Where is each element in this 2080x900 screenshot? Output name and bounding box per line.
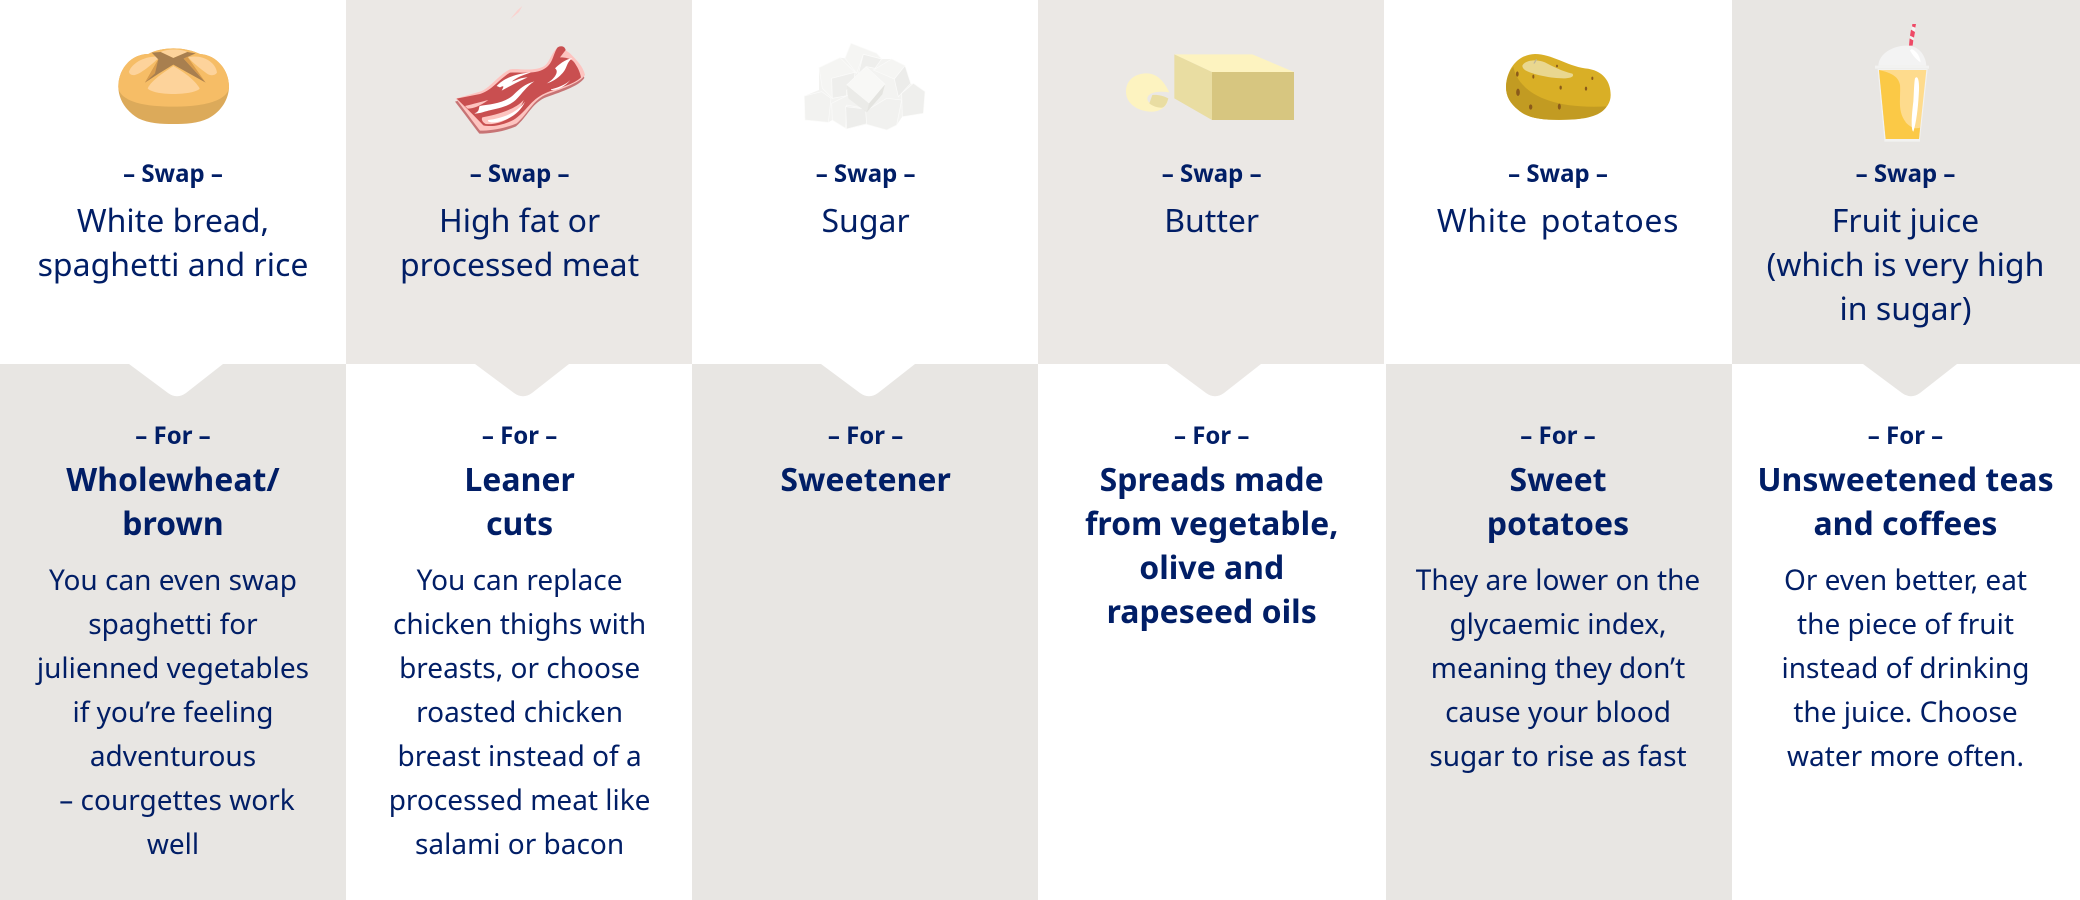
swap item: White potatoes	[1437, 199, 1679, 242]
replacement: olive and	[1139, 546, 1284, 588]
replacement	[1085, 458, 1338, 632]
replacement: Sweet	[1509, 458, 1607, 500]
detail: They are lower on the	[1416, 561, 1700, 599]
replacement: cuts	[486, 502, 553, 544]
detail: meaning they don’t	[1431, 649, 1685, 687]
replacement: rapeseed oils	[1107, 590, 1317, 632]
detail: roasted chicken	[416, 693, 623, 731]
for label: – For –	[1174, 419, 1249, 452]
detail: adventurous	[90, 737, 256, 775]
column 1: bread	[35, 157, 309, 863]
swap item: spaghetti and rice	[38, 243, 308, 286]
swap item: Fruit juice	[1832, 199, 1979, 242]
detail: You can even swap	[49, 561, 297, 599]
replacement: Leaner	[464, 458, 575, 500]
replacement	[1757, 458, 2054, 544]
detail: chicken thighs with	[393, 605, 646, 643]
swap label: – Swap –	[1856, 157, 1955, 190]
replacement: Unsweetened teas	[1757, 458, 2054, 500]
detail	[1416, 561, 1700, 775]
detail: – courgettes work	[59, 781, 295, 819]
detail: the juice. Choose	[1793, 693, 2018, 731]
swap item: White bread,	[77, 199, 269, 242]
swap label: – Swap –	[123, 157, 223, 190]
replacement	[464, 458, 575, 544]
swap label: – Swap –	[470, 157, 569, 190]
swap item: (which is very high	[1767, 243, 2044, 286]
detail: glycaemic index,	[1449, 605, 1667, 643]
detail: well	[147, 825, 199, 863]
replacement	[66, 458, 280, 544]
detail: instead of drinking	[1782, 649, 2029, 687]
detail: Or even better, eat	[1784, 561, 2027, 599]
replacement: Spreads made	[1100, 458, 1324, 500]
for label: – For –	[1520, 419, 1596, 452]
swap item	[38, 199, 308, 286]
detail: salami or bacon	[415, 825, 624, 863]
column 6: juice	[1757, 157, 2054, 775]
swap item	[400, 199, 639, 286]
replacement: Wholewheat/	[66, 458, 280, 500]
for label: – For –	[135, 419, 211, 452]
detail	[35, 561, 309, 863]
swap label: – Swap –	[816, 157, 915, 190]
detail: water more often.	[1787, 737, 2024, 775]
detail: spaghetti for	[88, 605, 258, 643]
for label: – For –	[828, 419, 903, 452]
detail: processed meat like	[389, 781, 650, 819]
swap item: in sugar)	[1840, 287, 1971, 330]
replacement: potatoes	[1487, 502, 1629, 544]
detail: breasts, or choose	[399, 649, 640, 687]
replacement: Sweetener	[780, 458, 951, 500]
column 4: butter	[1085, 157, 1338, 632]
for label: – For –	[482, 419, 557, 452]
column 2: meat	[389, 157, 650, 863]
replacement: from vegetable,	[1085, 502, 1338, 544]
for label: – For –	[1868, 419, 1943, 452]
detail	[1782, 561, 2029, 775]
detail: breast instead of a	[398, 737, 642, 775]
detail: julienned vegetables	[37, 649, 309, 687]
swap item: processed meat	[400, 243, 639, 286]
swap item: Sugar	[821, 199, 910, 242]
swap item	[1767, 199, 2044, 330]
detail: the piece of fruit	[1797, 605, 2014, 643]
detail: if you’re feeling	[72, 693, 274, 731]
swap item: Butter	[1164, 199, 1259, 242]
detail: cause your blood	[1445, 693, 1671, 731]
column 3: sugar	[780, 157, 951, 500]
swap item: High fat or	[439, 199, 600, 242]
replacement: brown	[122, 502, 224, 544]
detail	[389, 561, 650, 863]
swap label: – Swap –	[1162, 157, 1262, 190]
swap label: – Swap –	[1508, 157, 1608, 190]
replacement: and coffees	[1813, 502, 1998, 544]
replacement	[1487, 458, 1629, 544]
detail: You can replace	[417, 561, 623, 599]
column 5: potatoes	[1416, 157, 1700, 775]
detail: sugar to rise as fast	[1429, 737, 1687, 775]
